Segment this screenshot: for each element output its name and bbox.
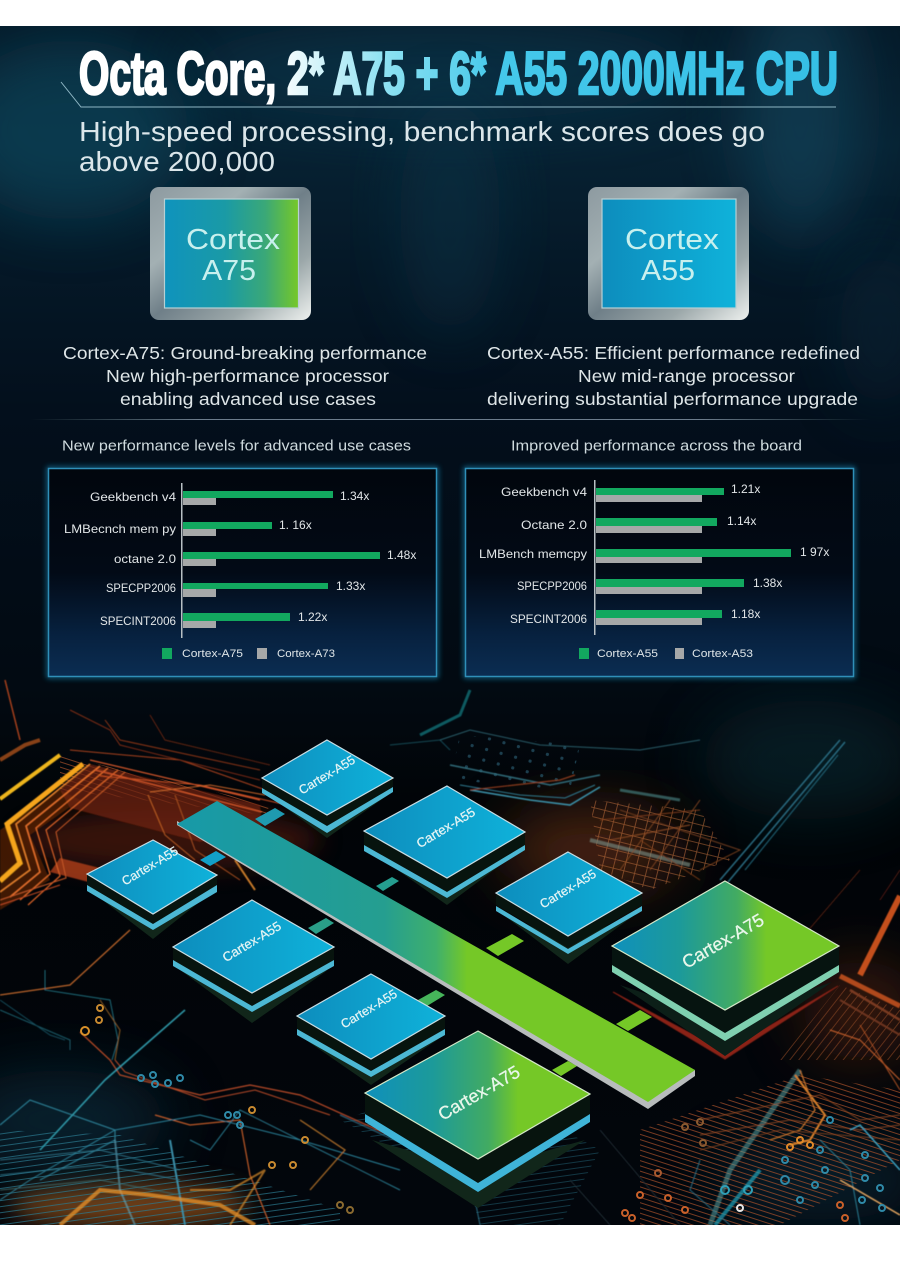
chip: Cartex-A75 lower — [365, 1031, 590, 1208]
chip: Cartex-A75 right — [612, 881, 839, 1056]
A75 legend: Cortex-A73 — [277, 648, 335, 660]
chip: Cartex-A55 lower: Cartex-A55 — [338, 987, 400, 1031]
circuit board background — [0, 680, 900, 1225]
circuit textures — [0, 735, 900, 1225]
chip icon: Cortex A55 — [588, 187, 749, 320]
chip: Cartex-A55 lower — [297, 974, 445, 1085]
A75 legend — [162, 648, 335, 660]
chip: Cartex-A55 upper centre: Cartex-A55 — [414, 804, 478, 851]
circuit pads — [81, 1005, 885, 1221]
panel: A55 bar chart — [466, 468, 854, 676]
A55 row labels: SPECPP2006 — [517, 579, 587, 593]
A55 values — [727, 482, 829, 621]
chip: Cartex-A55 upper centre — [364, 786, 525, 905]
A75 row labels — [64, 490, 176, 628]
A75 values: 1. 16x — [279, 518, 312, 532]
A75 values: 1.33x — [336, 579, 365, 593]
A75 row labels: SPECINT2006 — [100, 614, 176, 628]
chip icon: Cortex A75 — [150, 187, 311, 320]
A55 values: 1.21x — [731, 482, 760, 496]
A55 row labels: SPECINT2006 — [510, 612, 587, 626]
A75 values: 1.48x — [387, 548, 416, 562]
A55 legend: Cortex-A55 — [597, 648, 658, 660]
description: Cortex-A75: New high-performance processor — [106, 366, 389, 386]
A75 row labels: LMBecnch mem py — [64, 522, 176, 536]
chip: Cartex-A55 mid-left — [173, 900, 334, 1023]
chip: Cartex-A75 right: Cartex-A75 — [679, 910, 767, 972]
chip: Cartex-A75 lower: Cartex-A75 — [435, 1062, 523, 1124]
chart heading: A75: New performance levels for advanced use cases — [62, 438, 411, 454]
description: Cortex-A55: Cortex-A55: Efficient performance redefined — [487, 343, 860, 363]
A75 values: 1.22x — [298, 610, 327, 624]
description: Cortex-A75 — [63, 343, 427, 409]
A75 bars — [183, 491, 380, 628]
description: Cortex-A55 — [487, 343, 860, 409]
A55 row labels: Geekbench v4 — [501, 485, 587, 499]
A55 values: 1 97x — [800, 545, 829, 559]
A55 values: 1.38x — [753, 576, 782, 590]
subtitle: above 200,000 — [79, 146, 275, 177]
chip: Cartex-A55 top: Cartex-A55 — [296, 753, 358, 797]
A55 row labels: LMBench memcpy — [479, 547, 587, 561]
description: Cortex-A75: Cortex-A75: Ground-breaking performance — [63, 343, 427, 363]
A55 legend — [579, 648, 753, 660]
chip: Cartex-A55 right — [496, 852, 642, 964]
description: Cortex-A75: enabling advanced use cases — [120, 389, 376, 409]
connectors to bus — [200, 808, 652, 1076]
A75 row labels: octane 2.0 — [114, 552, 176, 566]
A55 values: 1.14x — [727, 514, 756, 528]
A55 legend: Cortex-A53 — [692, 648, 753, 660]
chip icon: Cortex A75: A75 — [202, 255, 256, 287]
chip: Cartex-A55 mid-left: Cartex-A55 — [220, 918, 284, 965]
A75 legend: Cortex-A75 — [182, 648, 243, 660]
chip: Cartex-A55 left — [87, 840, 217, 939]
chart heading: A55: Improved performance across the board — [511, 438, 802, 454]
A75 values — [279, 489, 416, 624]
panel: A75 bar chart — [48, 468, 436, 676]
A55 values: 1.18x — [731, 607, 760, 621]
A75 values: 1.34x — [340, 489, 369, 503]
chip icon: Cortex A75: Cortex — [186, 224, 281, 256]
chip: Cartex-A55 top — [262, 740, 393, 838]
description: Cortex-A55: New mid-range processor — [578, 366, 795, 386]
A55 row labels: Octane 2.0 — [521, 518, 587, 532]
A55 row labels — [479, 485, 587, 626]
A75 row labels: SPECPP2006 — [106, 581, 176, 595]
bus bar — [177, 801, 695, 1109]
A75 row labels: Geekbench v4 — [90, 490, 176, 504]
A55 bars — [596, 488, 791, 625]
chip icon: Cortex A55: A55 — [641, 255, 695, 287]
chip: Cartex-A55 right: Cartex-A55 — [537, 867, 599, 911]
chip icon: Cortex A55: Cortex — [625, 224, 720, 256]
subtitle — [80, 121, 764, 174]
chip: Cartex-A55 left: Cartex-A55 — [119, 844, 181, 888]
description: Cortex-A55: delivering substantial performance upgrade — [487, 389, 858, 409]
subtitle: High-speed processing, benchmark scores does go — [79, 116, 765, 147]
